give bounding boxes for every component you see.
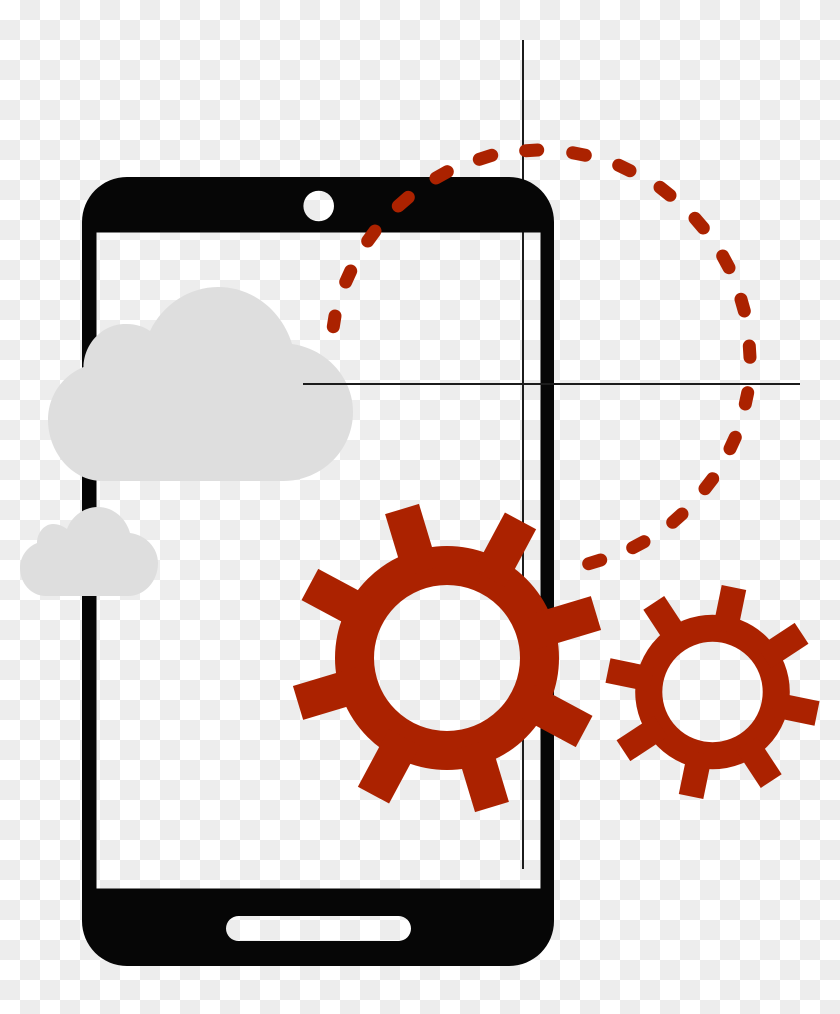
icon: small gear <box>605 585 820 799</box>
icon: smartphone <box>82 177 554 966</box>
dashed orbit circle <box>333 150 750 564</box>
horizontal crosshair line <box>303 383 800 385</box>
vertical crosshair line <box>522 40 524 869</box>
icon: large gear <box>293 504 601 812</box>
icon: large cloud <box>48 287 353 481</box>
icon: small cloud <box>20 507 158 596</box>
